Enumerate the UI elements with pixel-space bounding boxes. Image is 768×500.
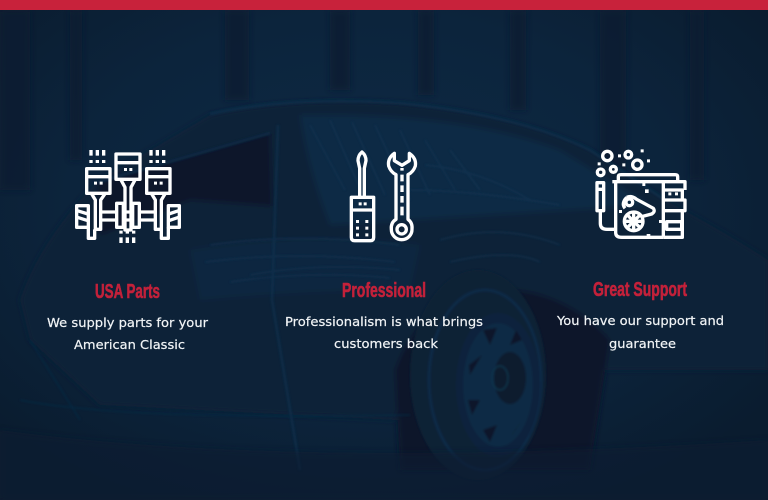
column: USA Parts (47, 150, 208, 352)
column: Professional (285, 152, 483, 351)
rear wheel (410, 270, 546, 480)
text: USA Parts description: We supply parts for your (47, 316, 208, 330)
heading: USA Parts: USA Parts (95, 281, 160, 303)
text: Great Support description: You have our support and (556, 314, 724, 328)
text: Great Support description: guarantee (609, 337, 676, 351)
car paint reflections (20, 101, 665, 470)
icon: screwdriver and wrench (351, 152, 416, 241)
icon: engine pistons (77, 150, 179, 243)
text: USA Parts description (47, 316, 208, 352)
heading: Great Support: Great Support (593, 279, 687, 301)
text: Professional description: customers back (334, 337, 438, 351)
text: Professional description: Professionalism is what brings (285, 315, 483, 329)
top red bar (0, 0, 768, 10)
column: Great Support (556, 149, 724, 351)
text: Great Support description (556, 314, 724, 351)
icon: engine with belt and bubbles (597, 149, 685, 238)
text: USA Parts description: American Classic (74, 338, 185, 352)
text: Professional description (285, 315, 483, 351)
heading: Professional: Professional (342, 280, 426, 302)
